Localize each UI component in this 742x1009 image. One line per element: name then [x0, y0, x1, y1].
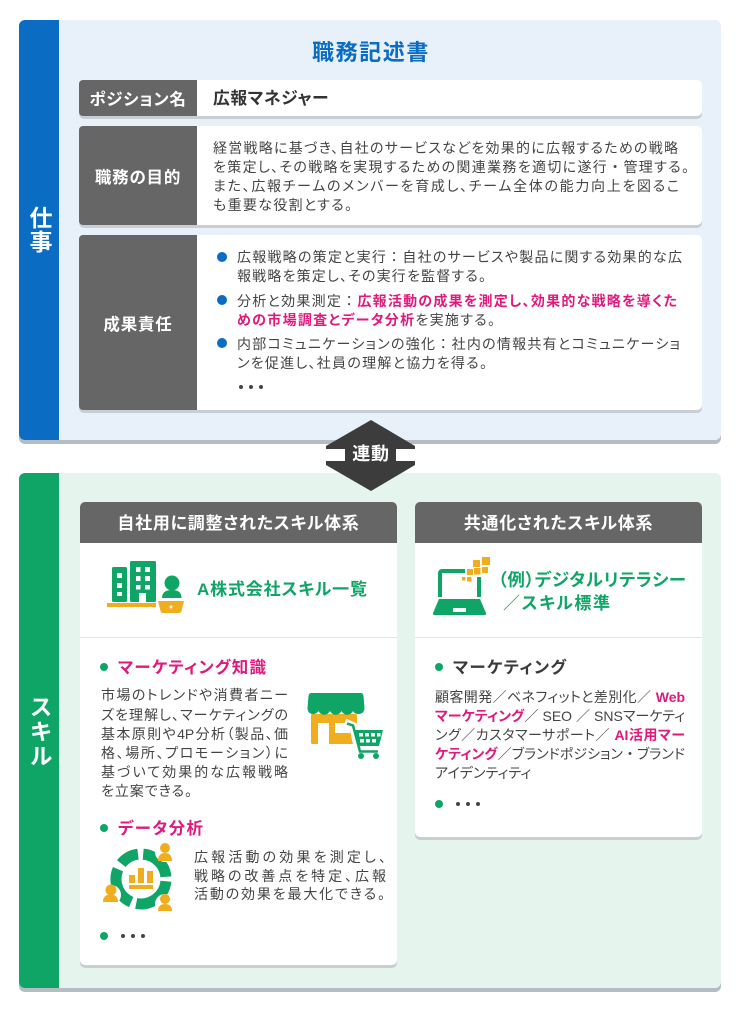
list: accountability: 分析と効果測定：広報活動の成果を測定し、効果的な戦略を導くた: [237, 293, 677, 309]
heading: digital literacy: [498, 570, 686, 613]
list: accountability: 広報戦略の策定と実行：自社のサービスや製品に関する効果的な広: [237, 249, 682, 265]
card heading: common skills: 共通化されたスキル体系: [464, 514, 653, 533]
text: purpose: [213, 140, 689, 213]
row: position name: [79, 80, 702, 116]
text: marketing knowledge: [101, 687, 288, 799]
card: common skills: [415, 502, 702, 837]
text: purpose: も重要な役割とする。: [213, 197, 352, 213]
text: purpose: 経営戦略に基づき、自社のサービスなどを効果的に広報するための戦略: [213, 140, 678, 156]
text: marketing items: 顧客開発／ベネフィットと差別化／ Web: [435, 689, 685, 705]
label: purpose: [79, 126, 197, 225]
panel: job section: [19, 20, 721, 440]
heading: digital literacy: （例）デジタルリテラシー: [498, 570, 686, 590]
text: marketing knowledge: 基本原則や4P分析（製品、価: [101, 726, 288, 742]
text: marketing knowledge: 格、場所、プロモーション）に: [101, 745, 288, 761]
panel: skill section: [19, 473, 721, 988]
list: accountability: [217, 249, 682, 389]
side label: skill: スキル: [26, 695, 52, 768]
list: accountability: 内部コミュニケーションの強化：社内の情報共有とコミュニケーショ: [237, 336, 680, 352]
text: marketing items: ング／カスタマーサポート／ AI活用マー: [435, 727, 685, 743]
label: accountability: [79, 235, 197, 410]
heading: data analysis: データ分析: [118, 820, 203, 838]
row: purpose: [79, 126, 702, 225]
label: position name: ポジション名: [89, 91, 187, 109]
label: linked: 連動: [352, 444, 390, 464]
label: accountability: 成果責任: [103, 316, 173, 334]
side label: skill: [19, 473, 59, 988]
label: purpose: 職務の目的: [95, 168, 181, 186]
more: common skills: [435, 800, 480, 808]
list: accountability: めの市場調査とデータ分析を実施する。: [237, 312, 495, 328]
text: marketing knowledge: 基づいて効果的な広報戦略: [101, 764, 288, 780]
row: accountability: [79, 235, 702, 410]
text: company skill list: A株式会社スキル一覧: [197, 580, 367, 599]
text: data analysis: 戦略の改善点を特定、広報: [194, 868, 386, 884]
arrow: linked: [326, 420, 415, 491]
heading: marketing knowledge: マーケティング知識: [118, 659, 266, 677]
text: marketing items: アイデンティティ: [435, 765, 531, 781]
dot: [435, 663, 443, 671]
divider: [80, 637, 397, 638]
text: marketing items: [435, 689, 685, 781]
side label: job: [19, 20, 59, 440]
list: accountability: ンを促進し、社員の理解と協力を得る。: [237, 355, 487, 371]
text: purpose: また、広報チームのメンバーを育成し、チーム全体の能力向上を図るこ: [213, 178, 679, 194]
text: data analysis: [194, 849, 386, 902]
text: marketing knowledge: を立案できる。: [101, 783, 192, 799]
card heading: common skills: [415, 502, 702, 543]
divider: [415, 637, 702, 638]
text: purpose: を策定し、その戦略を実現するための関連業務を適切に遂行・管理する。: [213, 159, 689, 175]
title: 職務記述書: [312, 40, 430, 65]
text: marketing knowledge: ズを理解し、マーケティングの: [101, 707, 288, 723]
text: data analysis: 広報活動の効果を測定し、: [194, 849, 386, 865]
label: position name: [79, 80, 197, 116]
dot: [100, 663, 108, 671]
text: marketing knowledge: 市場のトレンドや消費者ニー: [101, 687, 288, 703]
text: data analysis: 活動の効果を最大化できる。: [194, 886, 385, 902]
heading: marketing: マーケティング: [453, 659, 566, 677]
heading: digital literacy: ／スキル標準: [503, 594, 610, 613]
side label: job: 仕事: [26, 206, 52, 254]
card: company skills: [80, 502, 397, 965]
dot: [100, 824, 108, 832]
text: marketing items: ケティング／ブランドポジション・ブランド: [435, 746, 685, 762]
list: accountability: 報戦略を策定し、その実行を監督する。: [237, 268, 486, 284]
value: position name: 広報マネジャー: [213, 89, 329, 108]
card heading: company skills: [80, 502, 397, 543]
text: marketing items: マーケティング／ SEO ／ SNSマーケティ: [435, 708, 685, 724]
more: company skills: [100, 932, 145, 940]
card heading: company skills: 自社用に調整されたスキル体系: [117, 514, 360, 533]
